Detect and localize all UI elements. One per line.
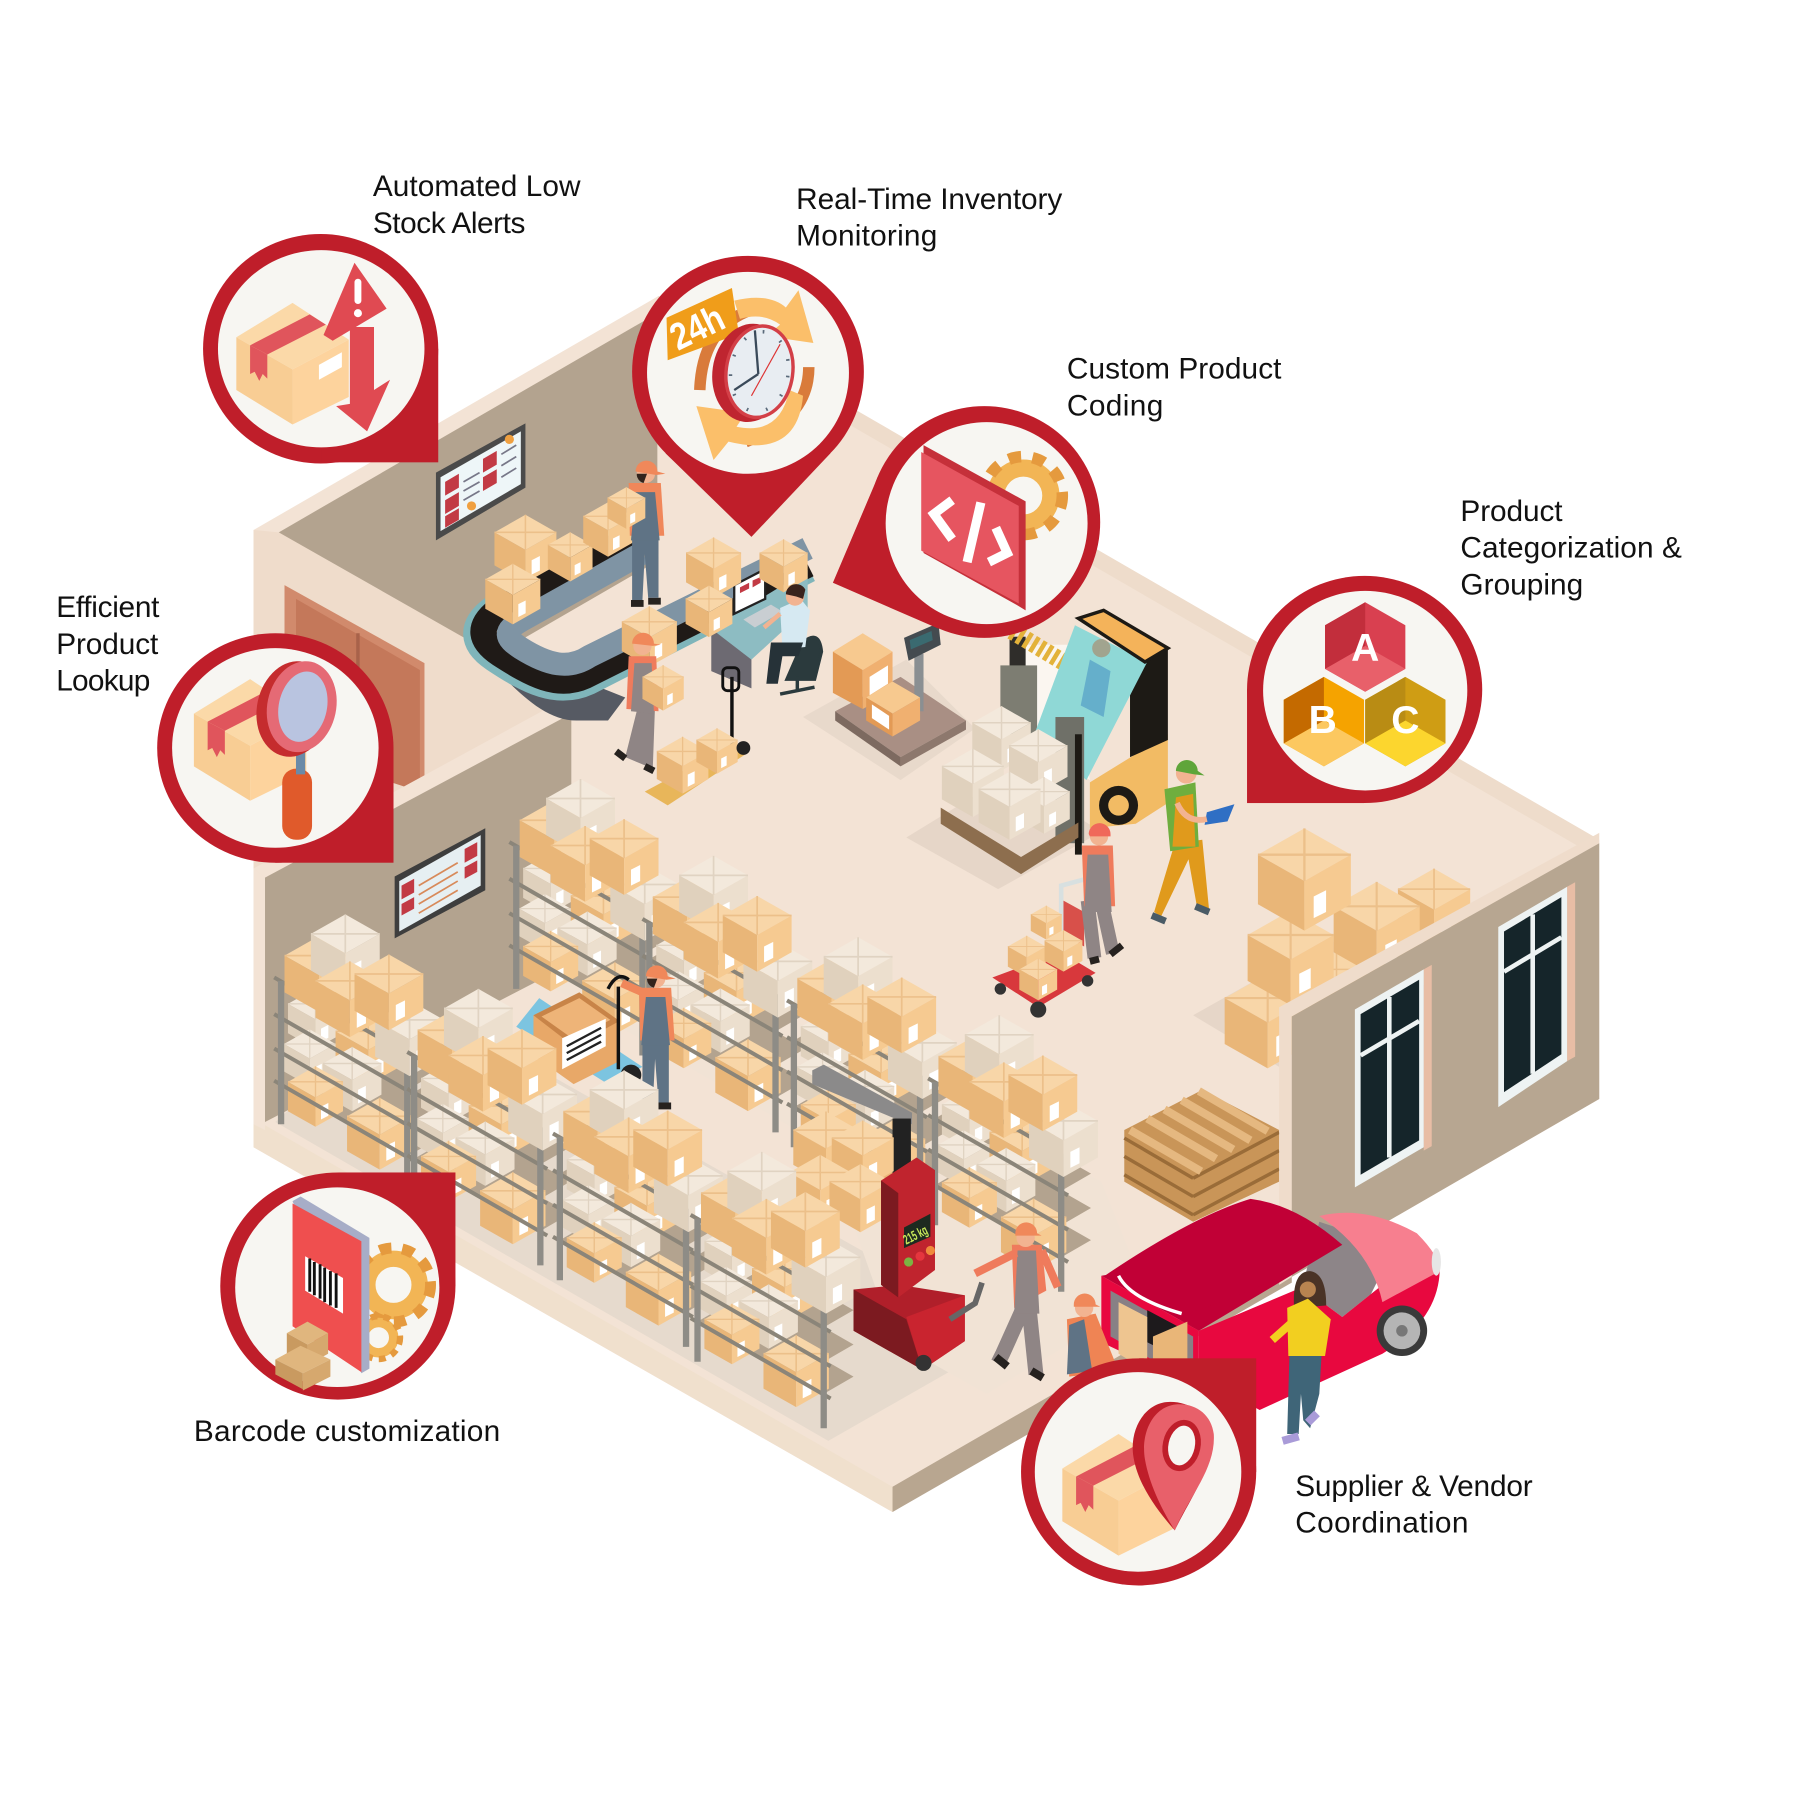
icon: hexagon C [1365, 677, 1446, 766]
pin: custom product coding [833, 406, 1100, 638]
label: barcode customization: Barcode customization [194, 1415, 500, 1448]
worker carrying box [616, 633, 684, 771]
wall: back left [279, 313, 657, 683]
seated worker with chair [764, 584, 821, 694]
window: left [1355, 965, 1432, 1187]
label: automated low stock alerts: Automated Low [373, 170, 581, 203]
label: real-time inventory monitoring: Real-Time Inventory [796, 183, 1062, 216]
label: product categorization and grouping [1460, 495, 1682, 601]
icon: hexagon B [1284, 677, 1364, 766]
wall: lower left [254, 695, 571, 1130]
icon: hexagon C: C [1391, 699, 1419, 742]
pallet of pale boxes [941, 706, 1078, 874]
icon: box [194, 679, 306, 801]
building: floor and slab [254, 296, 1599, 1512]
pallet truck with boxes [645, 668, 750, 805]
worker at conveyor [607, 461, 665, 607]
label: efficient product lookup: Product [56, 628, 159, 661]
icon: gear [984, 457, 1062, 535]
icon: large gears [356, 1248, 431, 1359]
label: custom product coding: Coding [1067, 389, 1163, 422]
pin: efficient product lookup [157, 633, 393, 863]
worker with cart [992, 823, 1122, 1018]
wall display board: upper [436, 423, 525, 540]
worker unloading car [1067, 1293, 1119, 1377]
icon: hexagon A [1325, 602, 1405, 692]
label: efficient product lookup: Efficient [56, 591, 160, 624]
electric stacker body: 215 kg [901, 1223, 930, 1247]
label: custom product coding: Custom Product [1067, 353, 1282, 386]
label: product categorization and grouping: Product [1460, 495, 1563, 528]
pin: barcode customization [220, 1172, 455, 1400]
label: real-time inventory monitoring: Monitoring [796, 220, 937, 253]
forklift [1000, 610, 1168, 855]
pin: automated low stock alerts [203, 234, 438, 463]
pin: real-time inventory monitoring [632, 256, 864, 537]
label: custom product coding [1067, 353, 1282, 422]
wooden pallets [1124, 1090, 1279, 1222]
conveyor belt [476, 530, 808, 721]
icon: hexagon B: B [1309, 699, 1337, 742]
stacker mast with loaded boxes [789, 1065, 912, 1232]
icon: warning triangle and down arrow [324, 263, 390, 431]
worker with pallet jack and crate [516, 965, 676, 1112]
pin: supplier and vendor coordination [1021, 1358, 1256, 1585]
pin: product categorization and grouping [1247, 576, 1482, 803]
conveyor boxes [485, 502, 808, 667]
label: supplier and vendor coordination: Supplier & Vendor [1295, 1470, 1533, 1503]
label: automated low stock alerts [373, 170, 581, 240]
icon: phone with barcode [293, 1197, 369, 1373]
right stack of boxes [1225, 828, 1470, 1068]
window: right [1498, 882, 1575, 1107]
label: product categorization and grouping: Categorization & [1460, 532, 1682, 565]
worker with tablet [1152, 760, 1234, 921]
label: efficient product lookup: Lookup [56, 665, 150, 698]
red car [1101, 1199, 1441, 1410]
label: real-time inventory monitoring [796, 183, 1062, 253]
weighing scale with boxes [833, 623, 966, 766]
icon: box [236, 303, 349, 424]
icon: box [1062, 1434, 1175, 1556]
icon: magnifier [248, 654, 345, 840]
icon: circular arrows [696, 290, 813, 460]
electric stacker body [854, 1158, 982, 1371]
icon: 24h flag: 24h [664, 297, 731, 359]
wall display board: lower [395, 828, 485, 938]
icon: wall clock [706, 319, 799, 427]
wall: right with rim [1279, 833, 1599, 1285]
icon: hexagon A: A [1351, 627, 1379, 670]
label: product categorization and grouping: Grouping [1460, 568, 1583, 601]
label: automated low stock alerts: Stock Alerts [373, 207, 525, 240]
desk with computer [711, 569, 808, 688]
worker pushing stacker [975, 1222, 1058, 1378]
shelving: back row [509, 779, 1098, 1292]
icon: small boxes [275, 1322, 330, 1390]
label: efficient product lookup [56, 591, 160, 698]
woman beside car [1272, 1271, 1331, 1441]
shelving: front row [274, 914, 860, 1428]
partition block with door [254, 530, 571, 878]
icon: location pin [1133, 1402, 1214, 1530]
label: supplier and vendor coordination [1295, 1470, 1533, 1540]
icon: code tile [921, 445, 1026, 610]
label: supplier and vendor coordination: Coordination [1295, 1507, 1468, 1540]
